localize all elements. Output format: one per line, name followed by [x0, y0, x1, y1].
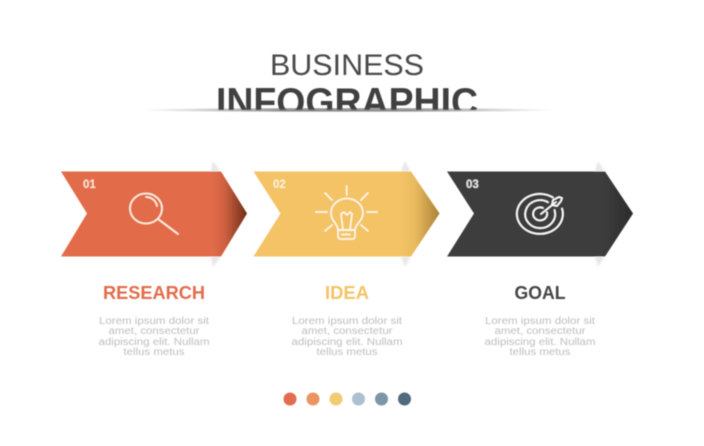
heading: goal: GOAL: [514, 283, 566, 303]
text block: goal: tellus metus: [510, 347, 571, 358]
text block: idea: Lorem ipsum dolor sit: [292, 316, 402, 327]
title line: business: BUSINESS: [270, 49, 424, 82]
panel: goal arrow: [447, 161, 634, 267]
number 03: 03: [466, 179, 479, 191]
title shadow line: [137, 108, 557, 112]
number 01: 01: [83, 179, 96, 191]
number 02: 02: [273, 179, 286, 191]
icon: target with arrow: [517, 194, 563, 234]
text block: goal: [484, 316, 596, 358]
title: [216, 49, 478, 124]
text block: research: adipiscing elit. Nullam: [98, 337, 210, 348]
text block: goal: adipiscing elit. Nullam: [484, 337, 596, 348]
heading: idea: IDEA: [325, 283, 369, 303]
panel: research arrow: [61, 161, 248, 267]
title line: infographic: INFOGRAPHIC: [216, 81, 478, 124]
heading: research: RESEARCH: [103, 283, 205, 303]
text block: research: Lorem ipsum dolor sit: [99, 316, 209, 327]
text block: research: [98, 316, 210, 358]
icon: magnifying glass: [130, 194, 178, 234]
text block: research: tellus metus: [124, 347, 185, 358]
text block: idea: tellus metus: [316, 347, 378, 358]
text block: research: amet, consectetur: [108, 326, 200, 337]
text block: idea: [292, 316, 402, 358]
text block: idea: amet, consectetur: [302, 326, 393, 337]
icon: light bulb: [316, 186, 377, 239]
text block: goal: Lorem ipsum dolor sit: [485, 316, 595, 327]
pagination dots: [284, 392, 411, 406]
text block: idea: adipiscing elit. Nullam: [292, 337, 402, 348]
panel: idea arrow: [254, 161, 440, 267]
text block: goal: amet, consectetur: [494, 326, 586, 337]
